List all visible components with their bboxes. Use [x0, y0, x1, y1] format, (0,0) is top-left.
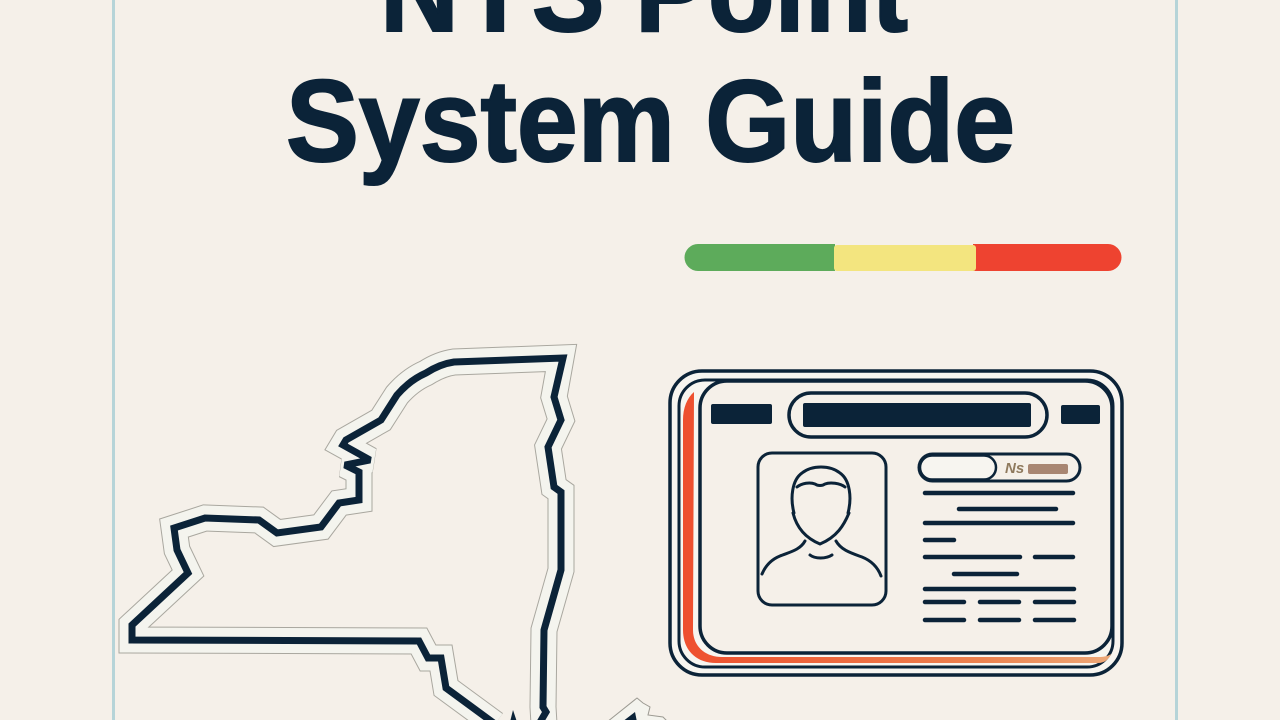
- header pill: [789, 393, 1047, 437]
- state border: [132, 358, 563, 720]
- orange card shadow: [683, 392, 1111, 663]
- red segment: [973, 244, 1122, 271]
- header left block: [711, 404, 772, 424]
- yellow segment: [834, 245, 976, 271]
- card second edge: [679, 380, 1113, 667]
- point scale bar: [684, 244, 1122, 271]
- card face: [700, 381, 1112, 653]
- green segment: [684, 244, 835, 271]
- Long Island fragment: [510, 698, 668, 720]
- driver license card icon: [670, 371, 1122, 675]
- license text lines: [925, 493, 1074, 620]
- name field pill: [919, 454, 1080, 481]
- photo with portrait: [758, 453, 886, 605]
- map: New York State outline: [132, 358, 668, 720]
- card outer edge: [670, 371, 1122, 675]
- outline halo: [132, 358, 561, 720]
- name field text: Ns: [1005, 460, 1024, 477]
- title: [286, 0, 1015, 186]
- title line 2: System Guide: [286, 56, 1015, 186]
- header right block: [1061, 405, 1100, 424]
